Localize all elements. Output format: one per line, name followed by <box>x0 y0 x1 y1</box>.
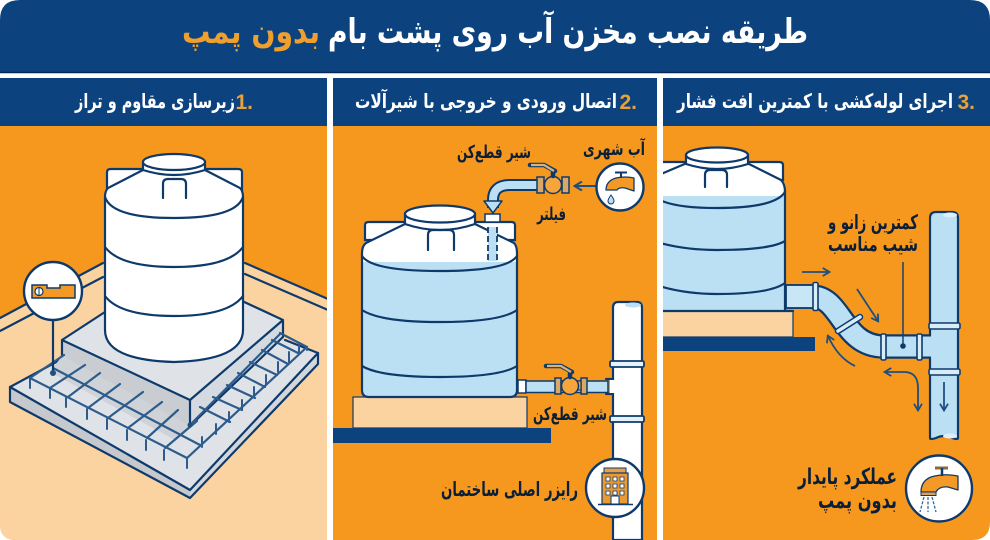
heading bar: step 2: 2. <box>619 91 637 114</box>
heading bar: step 1: 1. <box>235 91 253 114</box>
panel: low pressure-loss piping <box>640 126 990 540</box>
title: بدون پمپ <box>182 12 320 52</box>
heading bar: step 3: 3. <box>957 91 975 114</box>
shut-off valve: inlet <box>530 165 569 194</box>
main building riser <box>606 302 644 540</box>
header banner <box>0 0 990 72</box>
heading bar: step 3 <box>663 78 990 126</box>
heading bar: step 1 <box>0 78 327 126</box>
panel: inlet and outlet connections <box>333 126 657 540</box>
riser and tee pipe <box>929 212 958 439</box>
label: stable performance without pump: بدون پمپ <box>818 489 897 514</box>
partially visible water tank <box>663 146 794 312</box>
shut-off valve: outlet <box>546 366 587 394</box>
filled water tank <box>362 206 517 397</box>
icon: building <box>586 459 644 517</box>
label: outlet shut-off valve: شیر قطع‌کن <box>533 404 607 425</box>
label: minimum elbows and slope: شیب مناسب <box>828 232 918 256</box>
label: inlet shut-off valve: شیر قطع‌کن <box>457 142 531 163</box>
label: stable performance without pump: عملکرد پایدار <box>797 465 897 490</box>
inlet pipe with filter <box>484 185 538 222</box>
label: minimum elbows and slope: کمترین زانو و <box>827 210 918 234</box>
roof floor <box>0 260 327 540</box>
label: minimum elbows and slope <box>827 214 918 254</box>
callout: spirit level <box>24 262 82 376</box>
concrete pad and roof slab <box>655 311 815 351</box>
leader line to pipe <box>900 262 906 349</box>
icon: city water tap <box>596 164 644 210</box>
upper concrete slab <box>60 300 284 424</box>
base slab with rebar <box>8 300 320 500</box>
water tank <box>105 154 243 362</box>
heading bar: step 2: اتصال ورودی و خروجی با شیرآلات <box>355 88 617 113</box>
label: stable performance without pump <box>797 465 897 514</box>
title <box>182 10 808 52</box>
label: city water: آب شهری <box>583 137 646 160</box>
concrete pad and roof slab <box>333 397 551 443</box>
label: main riser: رایزر اصلی ساختمان <box>441 477 578 501</box>
heading bar: step 2 <box>333 78 657 126</box>
title: طریقه نصب مخزن آب روی پشت بام <box>328 10 808 52</box>
flow arrows <box>802 272 944 410</box>
icon: running faucet <box>906 456 972 522</box>
label: filter: فیلتر <box>536 204 566 225</box>
outlet pipe <box>518 380 608 393</box>
rebar mesh <box>30 333 307 468</box>
arrow: city water flow <box>575 185 596 187</box>
elbow pipe run <box>786 282 960 375</box>
heading bar: step 1: زیرسازی مقاوم و تراز <box>74 89 235 113</box>
panel: foundation and level <box>0 126 328 540</box>
